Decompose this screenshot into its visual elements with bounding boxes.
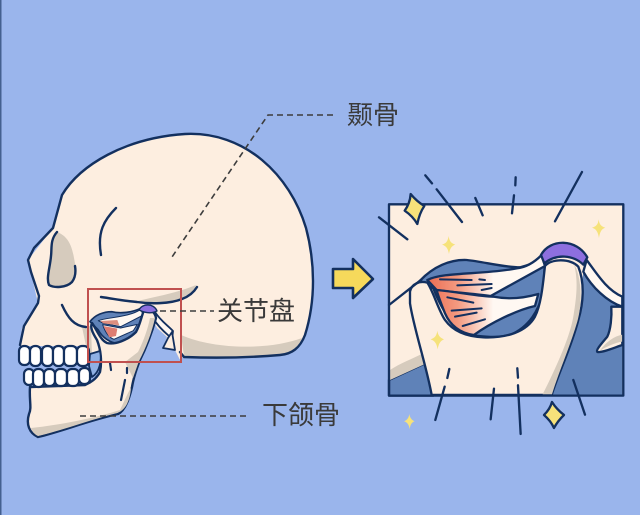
fossa blue [420,260,545,337]
mandible [28,309,156,437]
muscle upper [427,255,545,296]
panel frame [389,204,623,396]
sparkle: top left [405,194,424,224]
ligament behind condyle [153,312,173,340]
label: mandible: 下颌骨 [262,400,340,430]
ligament right [583,260,622,307]
illustration: skull side view [19,134,313,437]
leader lines [80,115,333,416]
small sparkles [404,219,605,429]
arrow [333,259,373,298]
red highlight box [88,289,181,362]
cranium fill [20,134,313,362]
mastoid fragment [163,332,175,350]
rays [379,172,585,434]
temple line [100,208,116,255]
blue region right [552,270,622,396]
small disc [139,305,157,313]
muscle fibres [440,279,492,326]
cranium outline [20,134,313,358]
cheekbone line [62,305,86,327]
condyle [410,260,583,395]
blue region left [389,363,433,396]
articular disc [541,243,587,265]
eye socket [48,232,76,287]
blue gap behind jaw [138,320,181,362]
label: articular disc: 关节盘 [217,296,295,326]
upper teeth [19,346,89,366]
panel background [389,204,623,396]
muscle lower [437,290,538,335]
fossa outline [389,281,420,305]
cream fragment right [597,307,622,352]
cranium shading [181,335,302,357]
small joint [90,308,143,343]
detail panel: jaw joint close-up [379,172,623,434]
label: temporal bone: 颞骨 [347,100,399,130]
mandible shading [31,388,131,436]
lower teeth [24,368,90,387]
condyle shading [543,264,581,394]
mandible inner line [110,363,127,400]
sparkle: bottom [544,402,564,428]
zygomatic line [101,287,197,303]
gum blue [89,351,101,377]
